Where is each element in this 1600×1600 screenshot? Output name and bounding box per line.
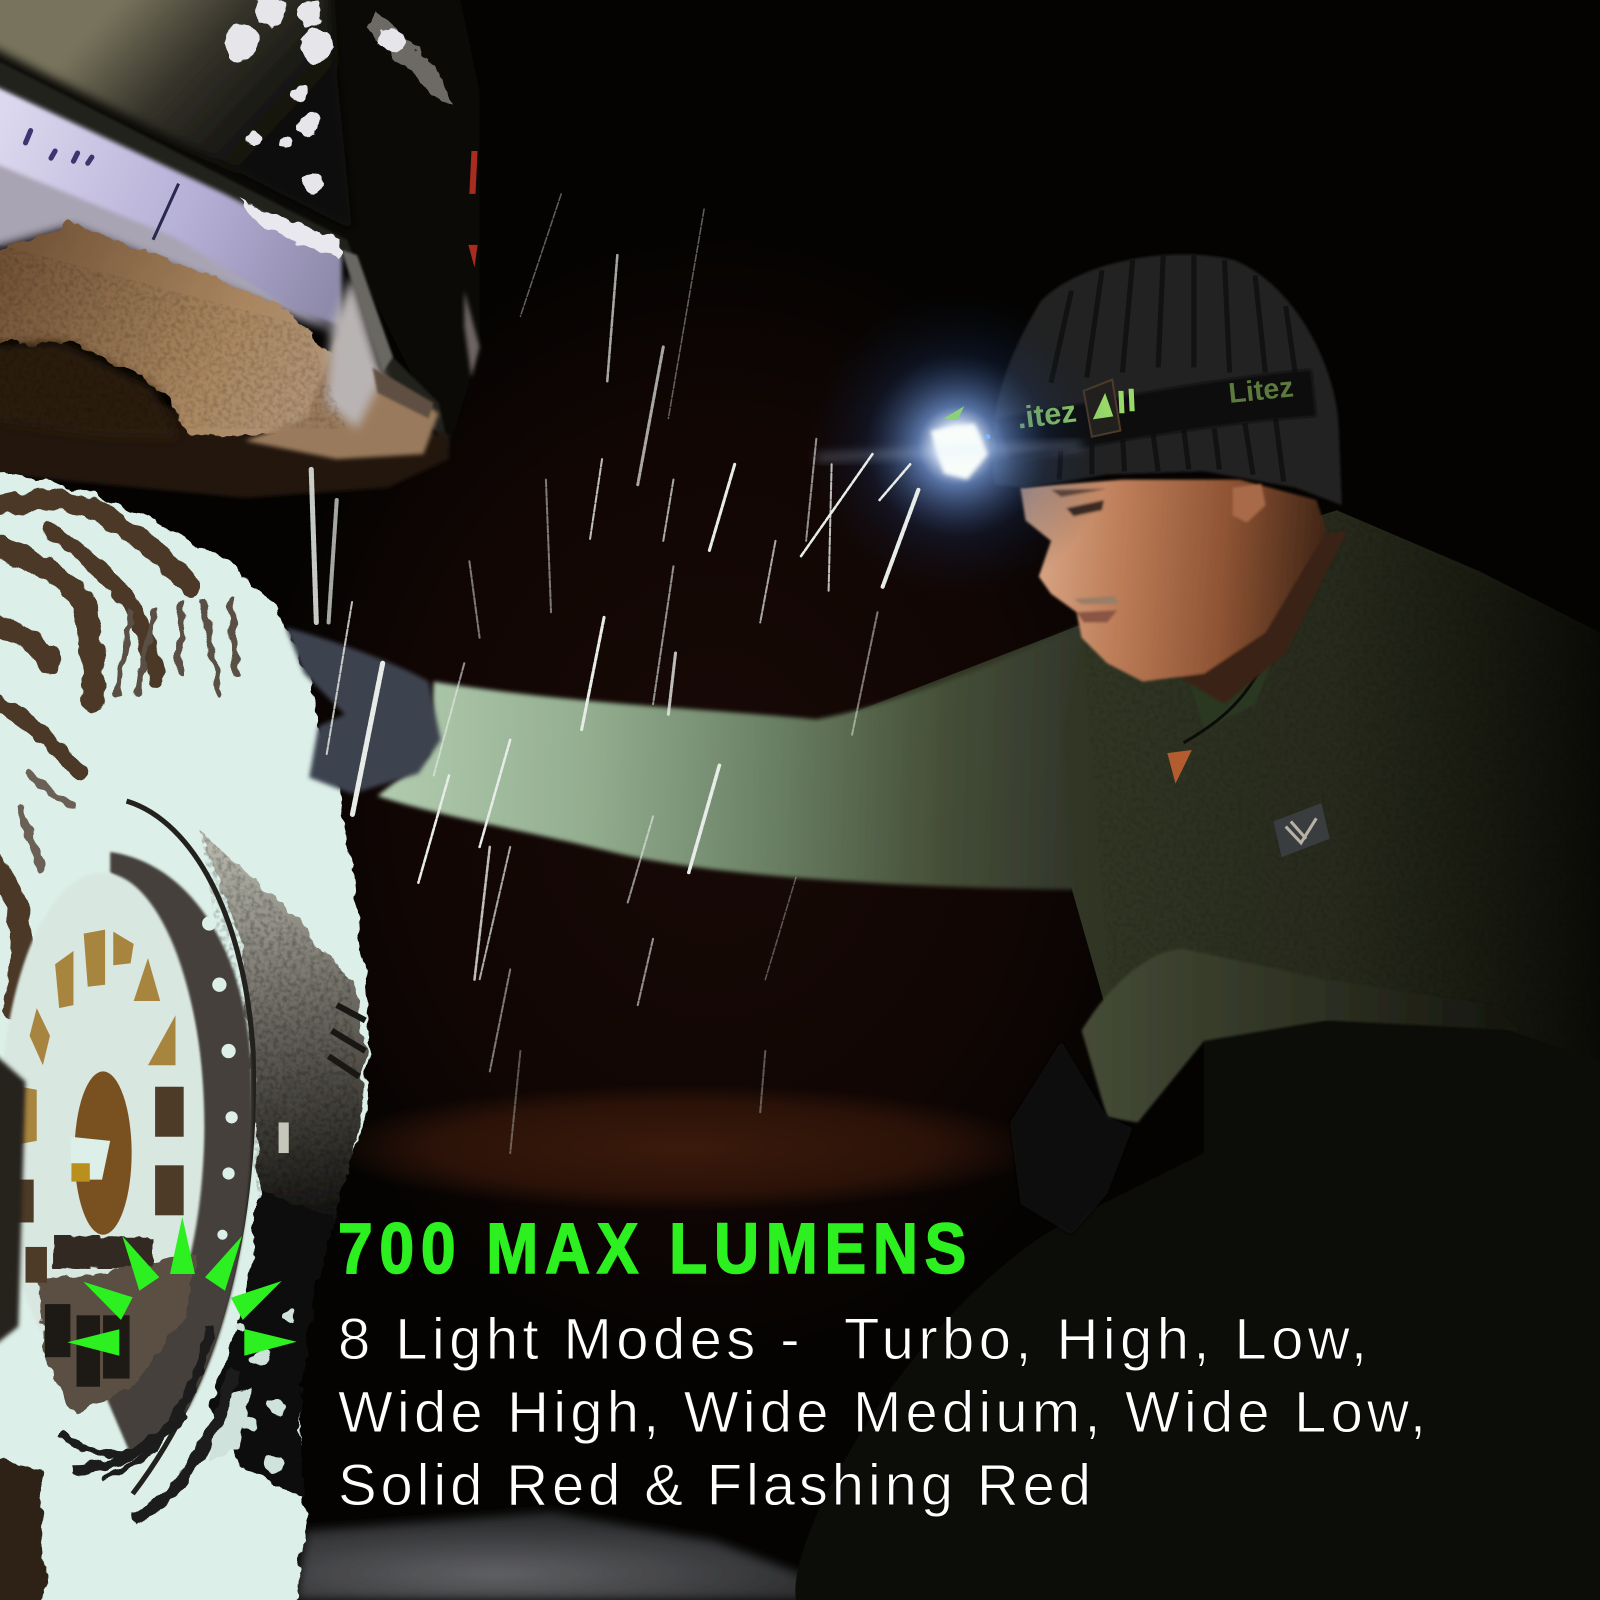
headlamp glare — [804, 293, 1110, 599]
trousers — [795, 1010, 1600, 1600]
outstretched arm — [378, 624, 1082, 890]
headband logo: Litez — [1227, 371, 1295, 410]
vehicle fender and mud — [0, 0, 480, 498]
right glove — [1010, 1041, 1133, 1235]
text block: light modes: 8 Light Modes - Turbo, High, Low, — [338, 1307, 1367, 1372]
text block: light modes — [338, 1307, 1426, 1518]
headband logo: .itez — [1015, 395, 1078, 436]
icon: green light burst — [67, 1217, 297, 1356]
head and face — [1020, 480, 1347, 704]
text block: light modes: Wide High, Wide Medium, Wide Low, — [338, 1380, 1426, 1445]
heading: 700 max lumens: 700 MAX LUMENS — [338, 1209, 966, 1289]
tire with snow — [0, 471, 369, 1600]
snowy ground — [296, 1512, 867, 1600]
beanie hat — [993, 254, 1342, 505]
badge on chest — [1273, 803, 1330, 857]
text block: light modes: Solid Red & Flashing Red — [338, 1453, 1091, 1518]
sweater torso — [796, 510, 1600, 1082]
left glove — [286, 628, 441, 794]
necklace pendant — [1167, 658, 1265, 784]
headband logo — [1015, 371, 1295, 437]
falling snow streaks — [311, 194, 918, 1153]
snow patches on lower tire — [209, 1310, 297, 1473]
sleeve and cuff on knee — [1082, 949, 1520, 1122]
